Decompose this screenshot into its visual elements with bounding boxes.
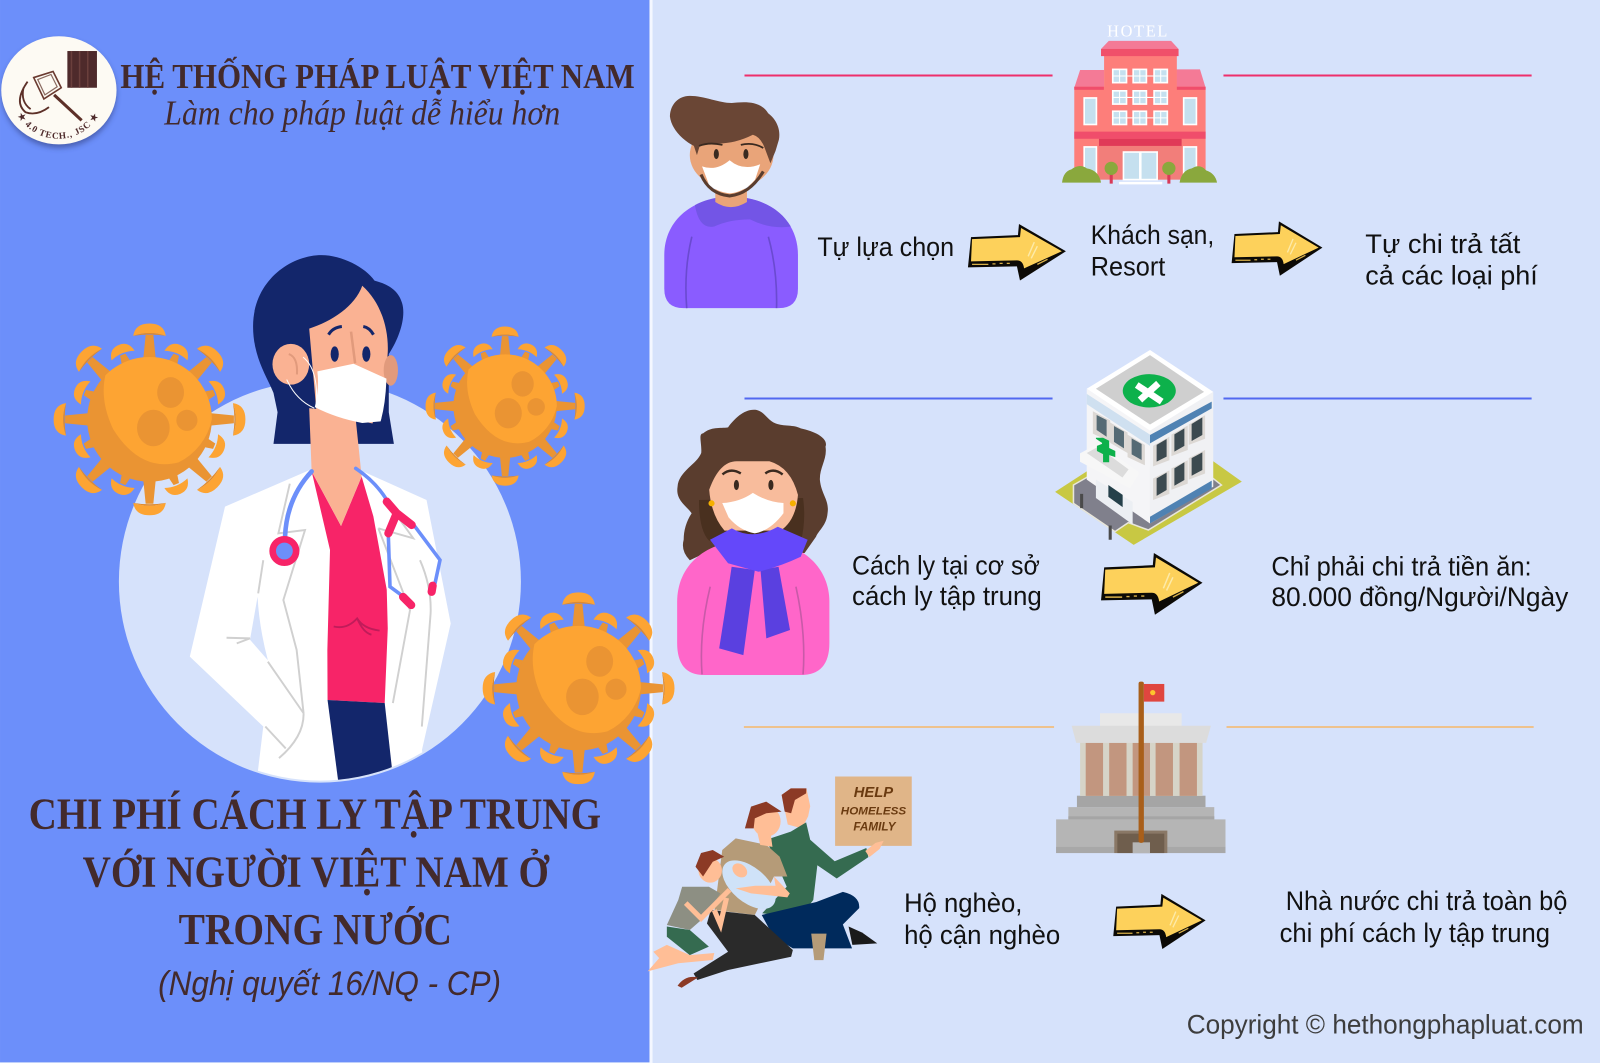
text: hotel, resort <box>1091 220 1214 282</box>
text: centralized quarantine: Cách ly tại cơ sở <box>852 550 1040 580</box>
legal reference: (Nghị quyết 16/NQ - CP) <box>158 965 501 1003</box>
icon: hotel: HOTEL <box>1107 22 1167 41</box>
main heading: CHI PHÍ CÁCH LY TẬP TRUNG <box>29 789 601 839</box>
help sign: HOMELESS <box>841 805 907 817</box>
virus right top <box>426 327 585 486</box>
doctor coat <box>190 468 451 786</box>
doctor right ear <box>384 355 398 386</box>
help sign: HELP <box>854 785 893 801</box>
child <box>648 850 730 971</box>
arrow 4 <box>1113 894 1206 949</box>
logo <box>0 36 120 151</box>
help sign <box>835 777 912 846</box>
panel divider <box>649 0 653 1063</box>
cup <box>811 934 827 960</box>
text: pay all fees <box>1365 229 1538 291</box>
illustration: doctor <box>190 255 451 786</box>
virus left <box>54 323 245 515</box>
panel: left background <box>0 0 649 1062</box>
virus right bottom <box>483 592 674 784</box>
doctor face <box>309 286 388 423</box>
doctor hair <box>253 255 403 444</box>
icon: hospital <box>1055 350 1242 545</box>
baby <box>714 851 790 918</box>
copyright: Copyright © hethongphapluat.com <box>1187 1010 1584 1040</box>
text: poor households: hộ cận nghèo <box>904 920 1060 950</box>
text: centralized quarantine <box>852 550 1042 611</box>
icon: hotel <box>1062 22 1217 184</box>
title: organisation: HỆ THỐNG PHÁP LUẬT VIỆT NAM <box>120 57 635 96</box>
text: hotel, resort: Resort <box>1091 252 1166 282</box>
text: pay all fees: cả các loại phí <box>1365 261 1538 291</box>
main heading: TRONG NƯỚC <box>179 904 452 954</box>
text: meal costs: 80.000 đồng/Người/Ngày <box>1271 582 1569 612</box>
help sign: FAMILY <box>853 821 897 834</box>
doctor neck <box>309 408 362 526</box>
icon: man with mask <box>664 96 798 308</box>
icon: government building <box>1056 682 1226 853</box>
text: hotel, resort: Khách sạn, <box>1091 220 1214 250</box>
arrow 2 <box>1232 221 1322 276</box>
main heading: VỚI NGƯỜI VIỆT NAM Ở <box>83 847 550 897</box>
icon: woman with scarf <box>677 410 829 675</box>
text: self-selected: Tự lựa chọn <box>817 232 954 262</box>
doctor mask <box>315 364 386 423</box>
text: state pays <box>1280 886 1567 948</box>
doctor circle backdrop <box>119 381 521 783</box>
text: state pays: Nhà nước chi trả toàn bộ <box>1286 886 1567 916</box>
text: state pays: chi phí cách ly tập trung <box>1280 918 1550 948</box>
main heading <box>29 789 601 954</box>
subtitle: slogan: Làm cho pháp luật dễ hiểu hơn <box>163 93 560 132</box>
doctor eyes and brows <box>329 327 373 363</box>
text: centralized quarantine: cách ly tập trung <box>852 581 1042 611</box>
text: poor households: Hộ nghèo, <box>904 888 1022 918</box>
stethoscope <box>273 468 440 605</box>
doctor left ear <box>272 344 309 385</box>
text: poor households <box>904 888 1060 950</box>
mother <box>678 802 793 988</box>
arrow 3 <box>1101 553 1202 615</box>
arrow 1 <box>968 224 1066 281</box>
text: pay all fees: Tự chi trả tất <box>1365 229 1521 259</box>
logo: ★ 4.0 TECH., JSC ★ <box>18 112 98 139</box>
text: meal costs: Chỉ phải chi trả tiền ăn: <box>1271 551 1532 581</box>
divider lines row 3 <box>744 726 1534 728</box>
text: meal costs <box>1271 551 1569 612</box>
father <box>762 788 884 948</box>
divider lines row 1 <box>744 75 1532 77</box>
icon: homeless family <box>648 777 912 988</box>
divider lines row 2 <box>744 397 1532 399</box>
